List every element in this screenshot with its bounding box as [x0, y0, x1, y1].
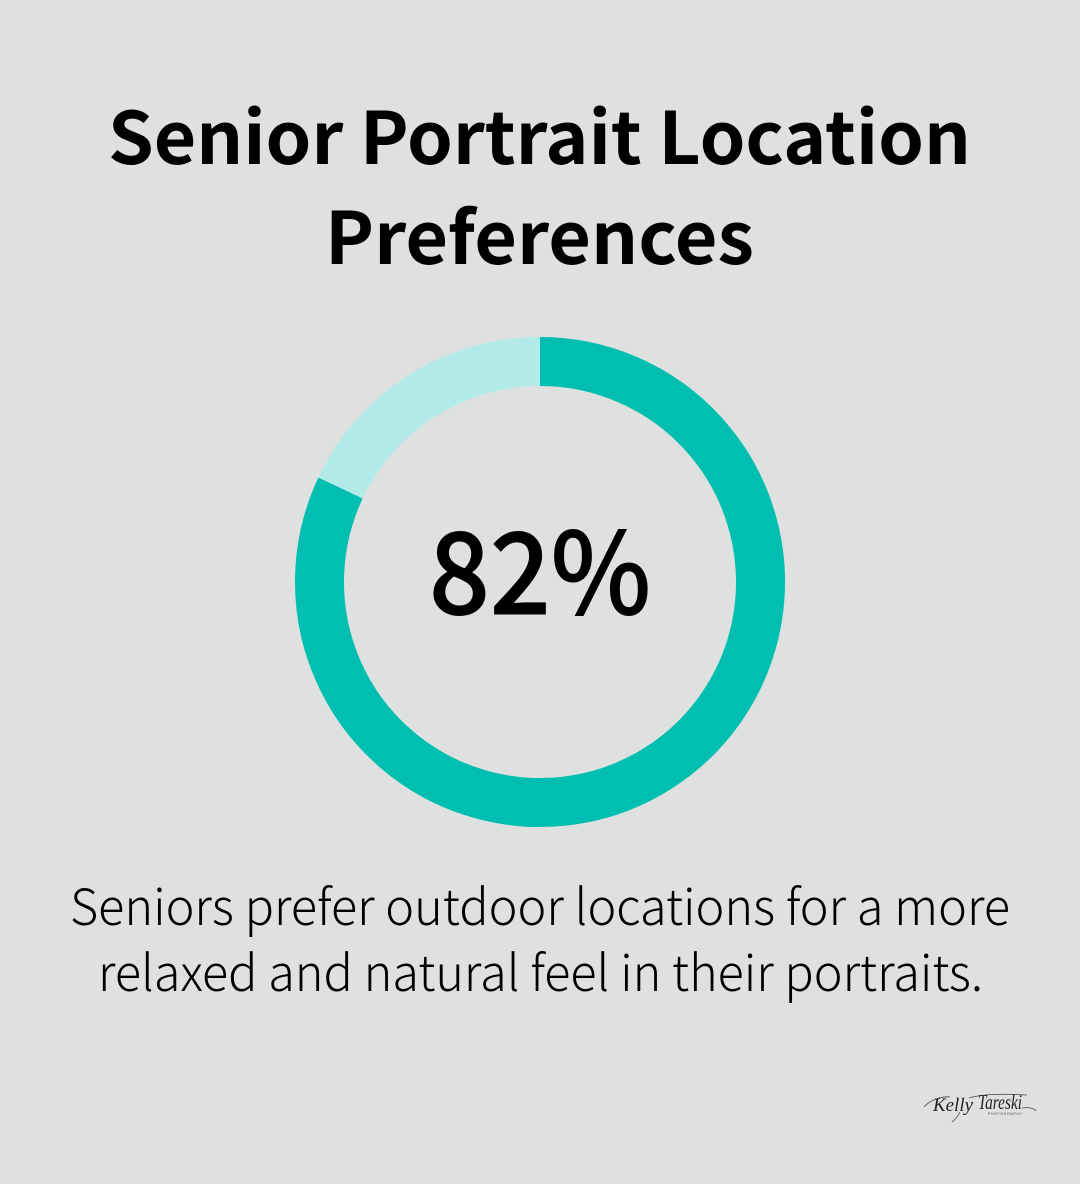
logo: photographer signature — [924, 1090, 1036, 1122]
description text — [70, 868, 1010, 1006]
donut chart: 82% — [320, 362, 761, 802]
ring segment: 82% — [320, 362, 761, 802]
title: Preferences — [325, 180, 754, 285]
logo: photographer signature: Kelly — [932, 1095, 974, 1116]
description text: relaxed and natural feel in their portraits. — [98, 934, 983, 1006]
title — [108, 80, 971, 285]
center value: 82% — [429, 483, 651, 647]
ring segment: remaining 18% — [340, 362, 540, 488]
title: Senior Portrait Location — [108, 80, 971, 185]
logo: photographer signature: Tareski — [978, 1090, 1022, 1114]
description text: Seniors prefer outdoor locations for a more — [70, 868, 1010, 940]
logo: photographer signature: PHOTOGRAPHY — [988, 1112, 1023, 1116]
